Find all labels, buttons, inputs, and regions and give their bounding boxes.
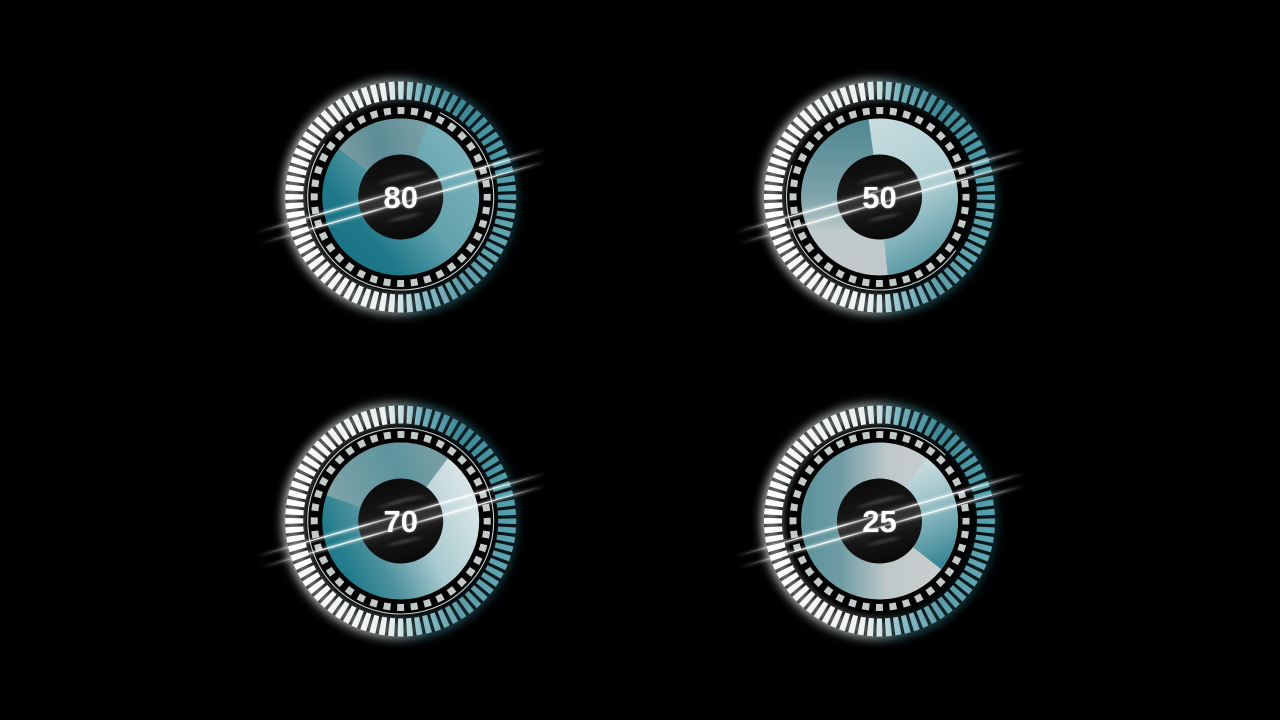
donut wedge segment: [880, 458, 958, 569]
outer tick ring: [292, 412, 510, 630]
gauge: 70: [254, 412, 547, 630]
donut base segment: [801, 118, 958, 276]
donut main segment: [322, 118, 479, 276]
outer tick ring: [292, 88, 510, 306]
centre hub: [827, 145, 932, 249]
gauge: 50: [733, 88, 1026, 306]
value 80: 80: [383, 180, 418, 215]
light streaks: [733, 148, 1026, 245]
centre hub: [349, 145, 453, 249]
value 50: 50: [862, 180, 897, 215]
value 70: 70: [383, 504, 418, 539]
square tick ring: [314, 110, 487, 284]
square tick ring: [793, 434, 966, 608]
outer tick ring: [770, 412, 988, 630]
centre hub: [827, 469, 932, 573]
thin ring: [308, 113, 494, 290]
thin ring: [786, 165, 956, 290]
donut base segment: [801, 442, 958, 600]
thin ring: [308, 428, 494, 614]
light streaks: [254, 148, 547, 245]
donut wedge segment: [326, 443, 448, 521]
square tick ring: [314, 434, 487, 608]
thin ring: [814, 428, 945, 455]
centre hub: [349, 469, 453, 573]
square tick ring: [793, 110, 966, 284]
light streaks: [733, 472, 1026, 569]
donut wedge segment: [339, 118, 428, 197]
donut wedge segment: [869, 119, 958, 275]
outer tick ring: [770, 88, 988, 306]
donut main segment: [322, 442, 479, 600]
value 25: 25: [862, 504, 897, 539]
gauge: 80: [254, 88, 547, 306]
light streaks: [254, 472, 547, 569]
gauge: 25: [733, 412, 1026, 630]
